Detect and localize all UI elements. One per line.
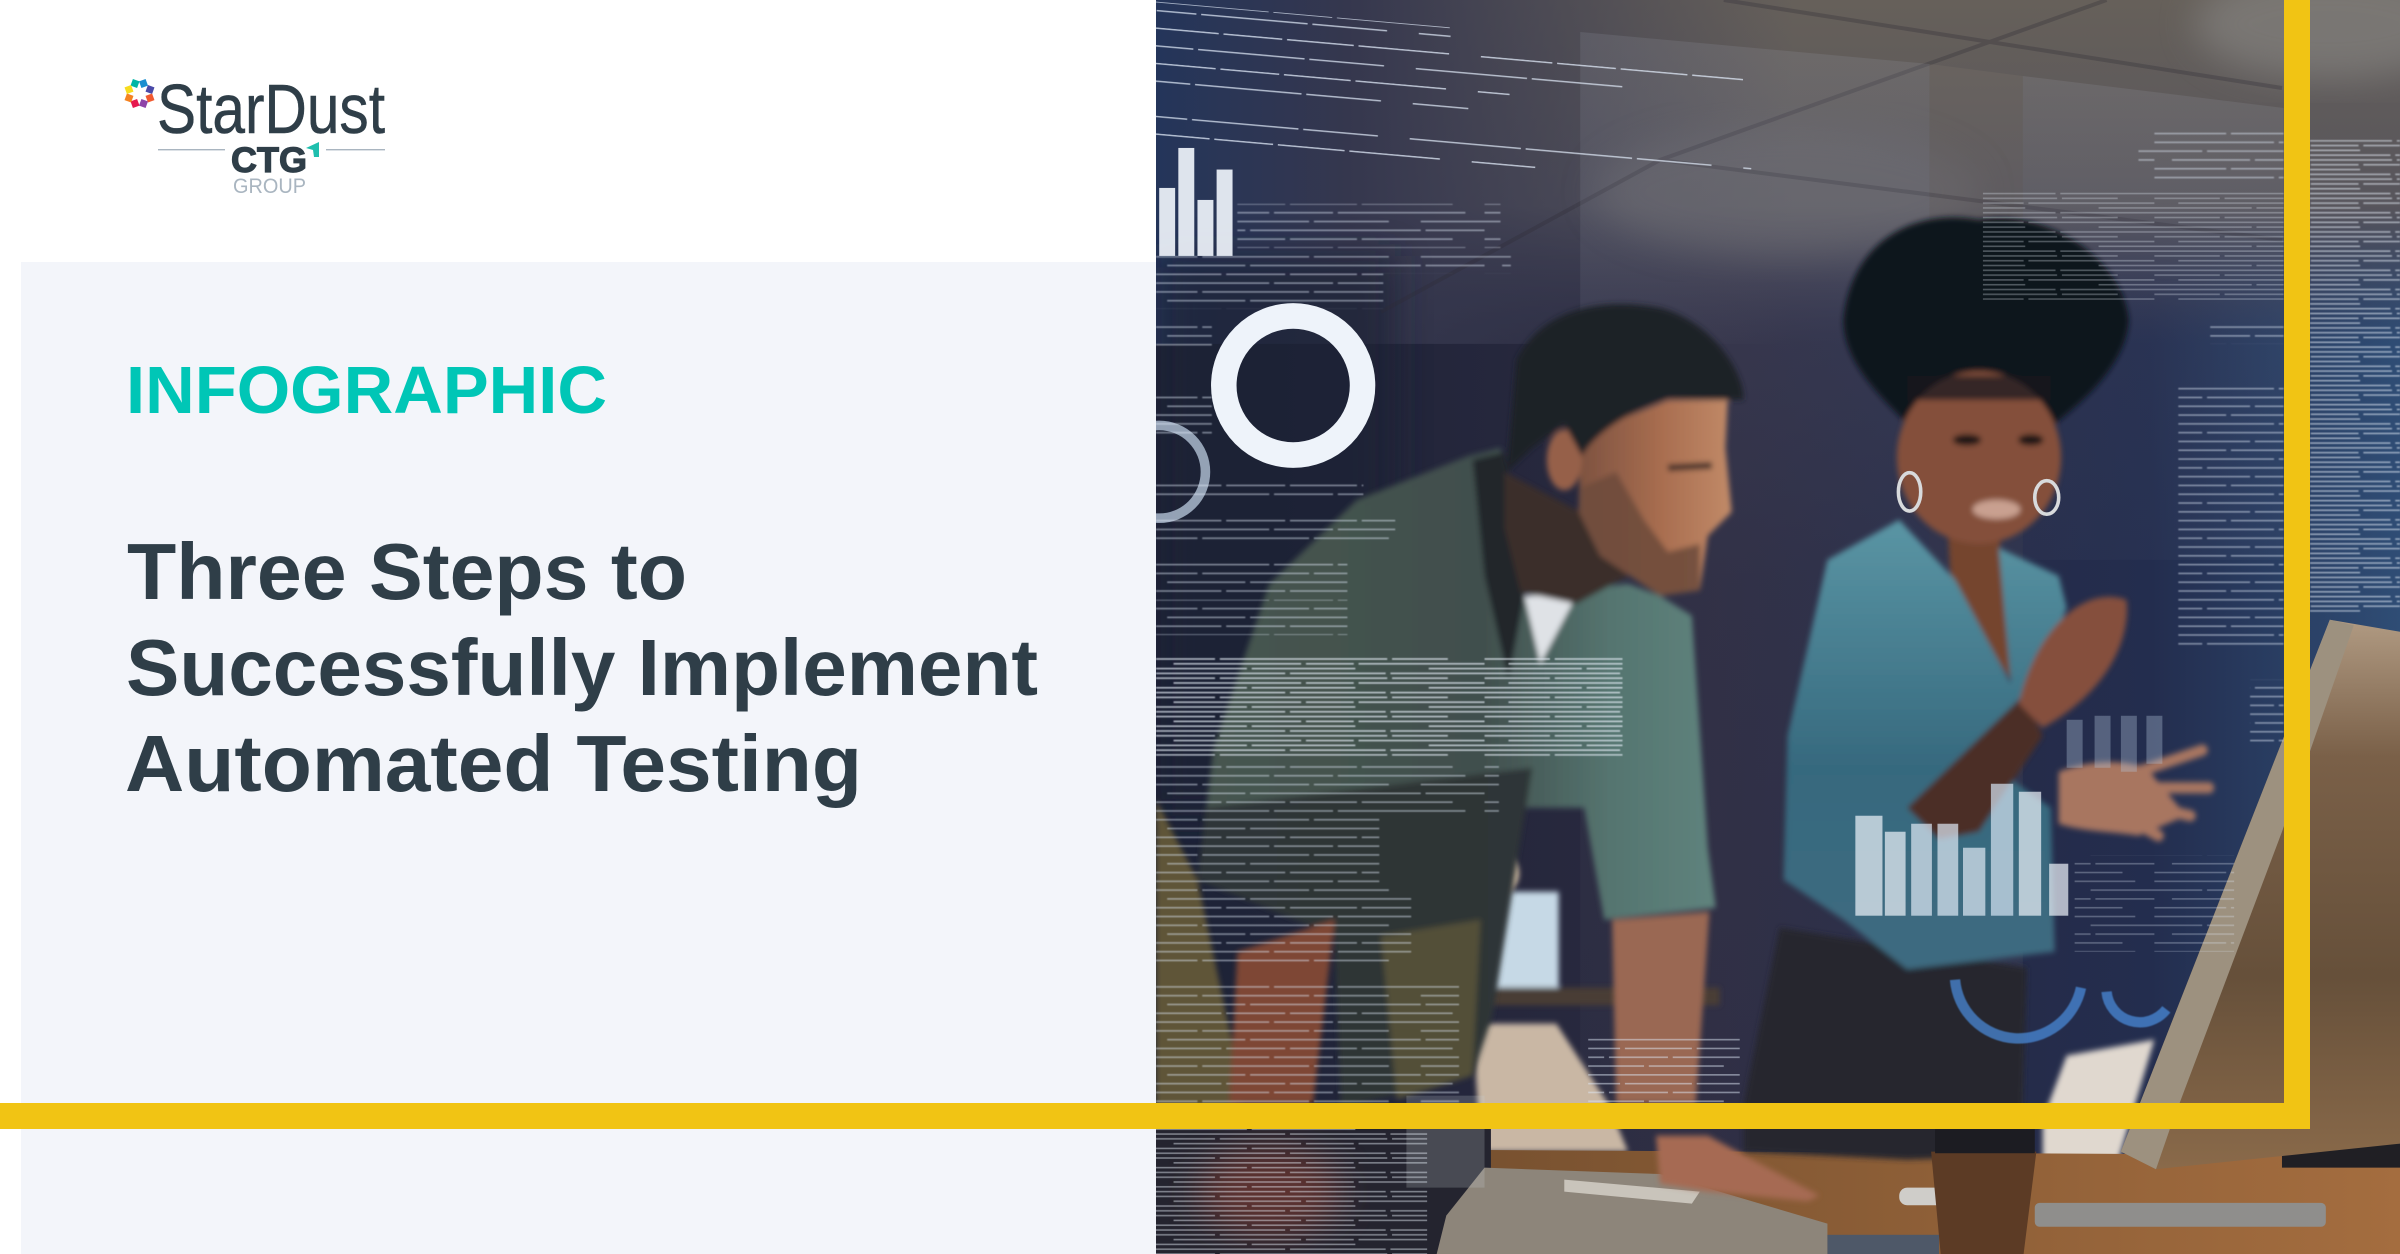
code block on lower right [2075, 856, 2234, 952]
title [125, 527, 1038, 808]
code block near woman's hair [1983, 192, 2284, 300]
chart overlay: upper-left bars [1159, 148, 1233, 256]
title: Three Steps to [127, 527, 687, 616]
photo: two colleagues at a transparent data screen [1156, 0, 2400, 1254]
chart overlay: bars in front of the woman [1855, 716, 2162, 916]
logo: StarDust CTG Group [124, 70, 385, 198]
chart overlay: donut rings on the left [1113, 316, 1363, 518]
earrings [1898, 473, 2059, 514]
code block beneath frame [1156, 1128, 1427, 1254]
background objects: window, lamp, chairs [1473, 851, 2154, 1160]
dense code block over man's chest [1156, 656, 1622, 756]
panel: light title background [21, 262, 1156, 1254]
icon: coloured star ring [125, 79, 154, 108]
person: woman gesturing [1744, 217, 2209, 1160]
code block right of frame [2310, 140, 2400, 612]
chart overlay: blue lower rings [1955, 980, 2166, 1038]
code text overlay [1144, 2, 2400, 1254]
logo group label: GROUP [233, 175, 306, 198]
icon: teal arrow [306, 142, 319, 157]
desk [1156, 1128, 2400, 1254]
background: dim office [1156, 0, 2400, 1254]
code block near man's arm [1588, 1036, 1740, 1104]
translucent glass panels [1580, 32, 2284, 1254]
logo CTG mark: CTG [231, 141, 307, 180]
person: man leaning forward [1156, 304, 1819, 1201]
title: Successfully Implement [126, 623, 1038, 712]
eyebrow: INFOGRAPHIC: INFOGRAPHIC [126, 353, 607, 428]
glass of water [1406, 1096, 1485, 1188]
frame: yellow horizontal bar [0, 1103, 2310, 1129]
heading block [125, 353, 1038, 808]
monitor [2121, 620, 2400, 1169]
frame: yellow vertical bar [2284, 0, 2310, 1129]
coffee cup [1931, 1129, 2036, 1254]
title: Automated Testing [125, 719, 862, 808]
